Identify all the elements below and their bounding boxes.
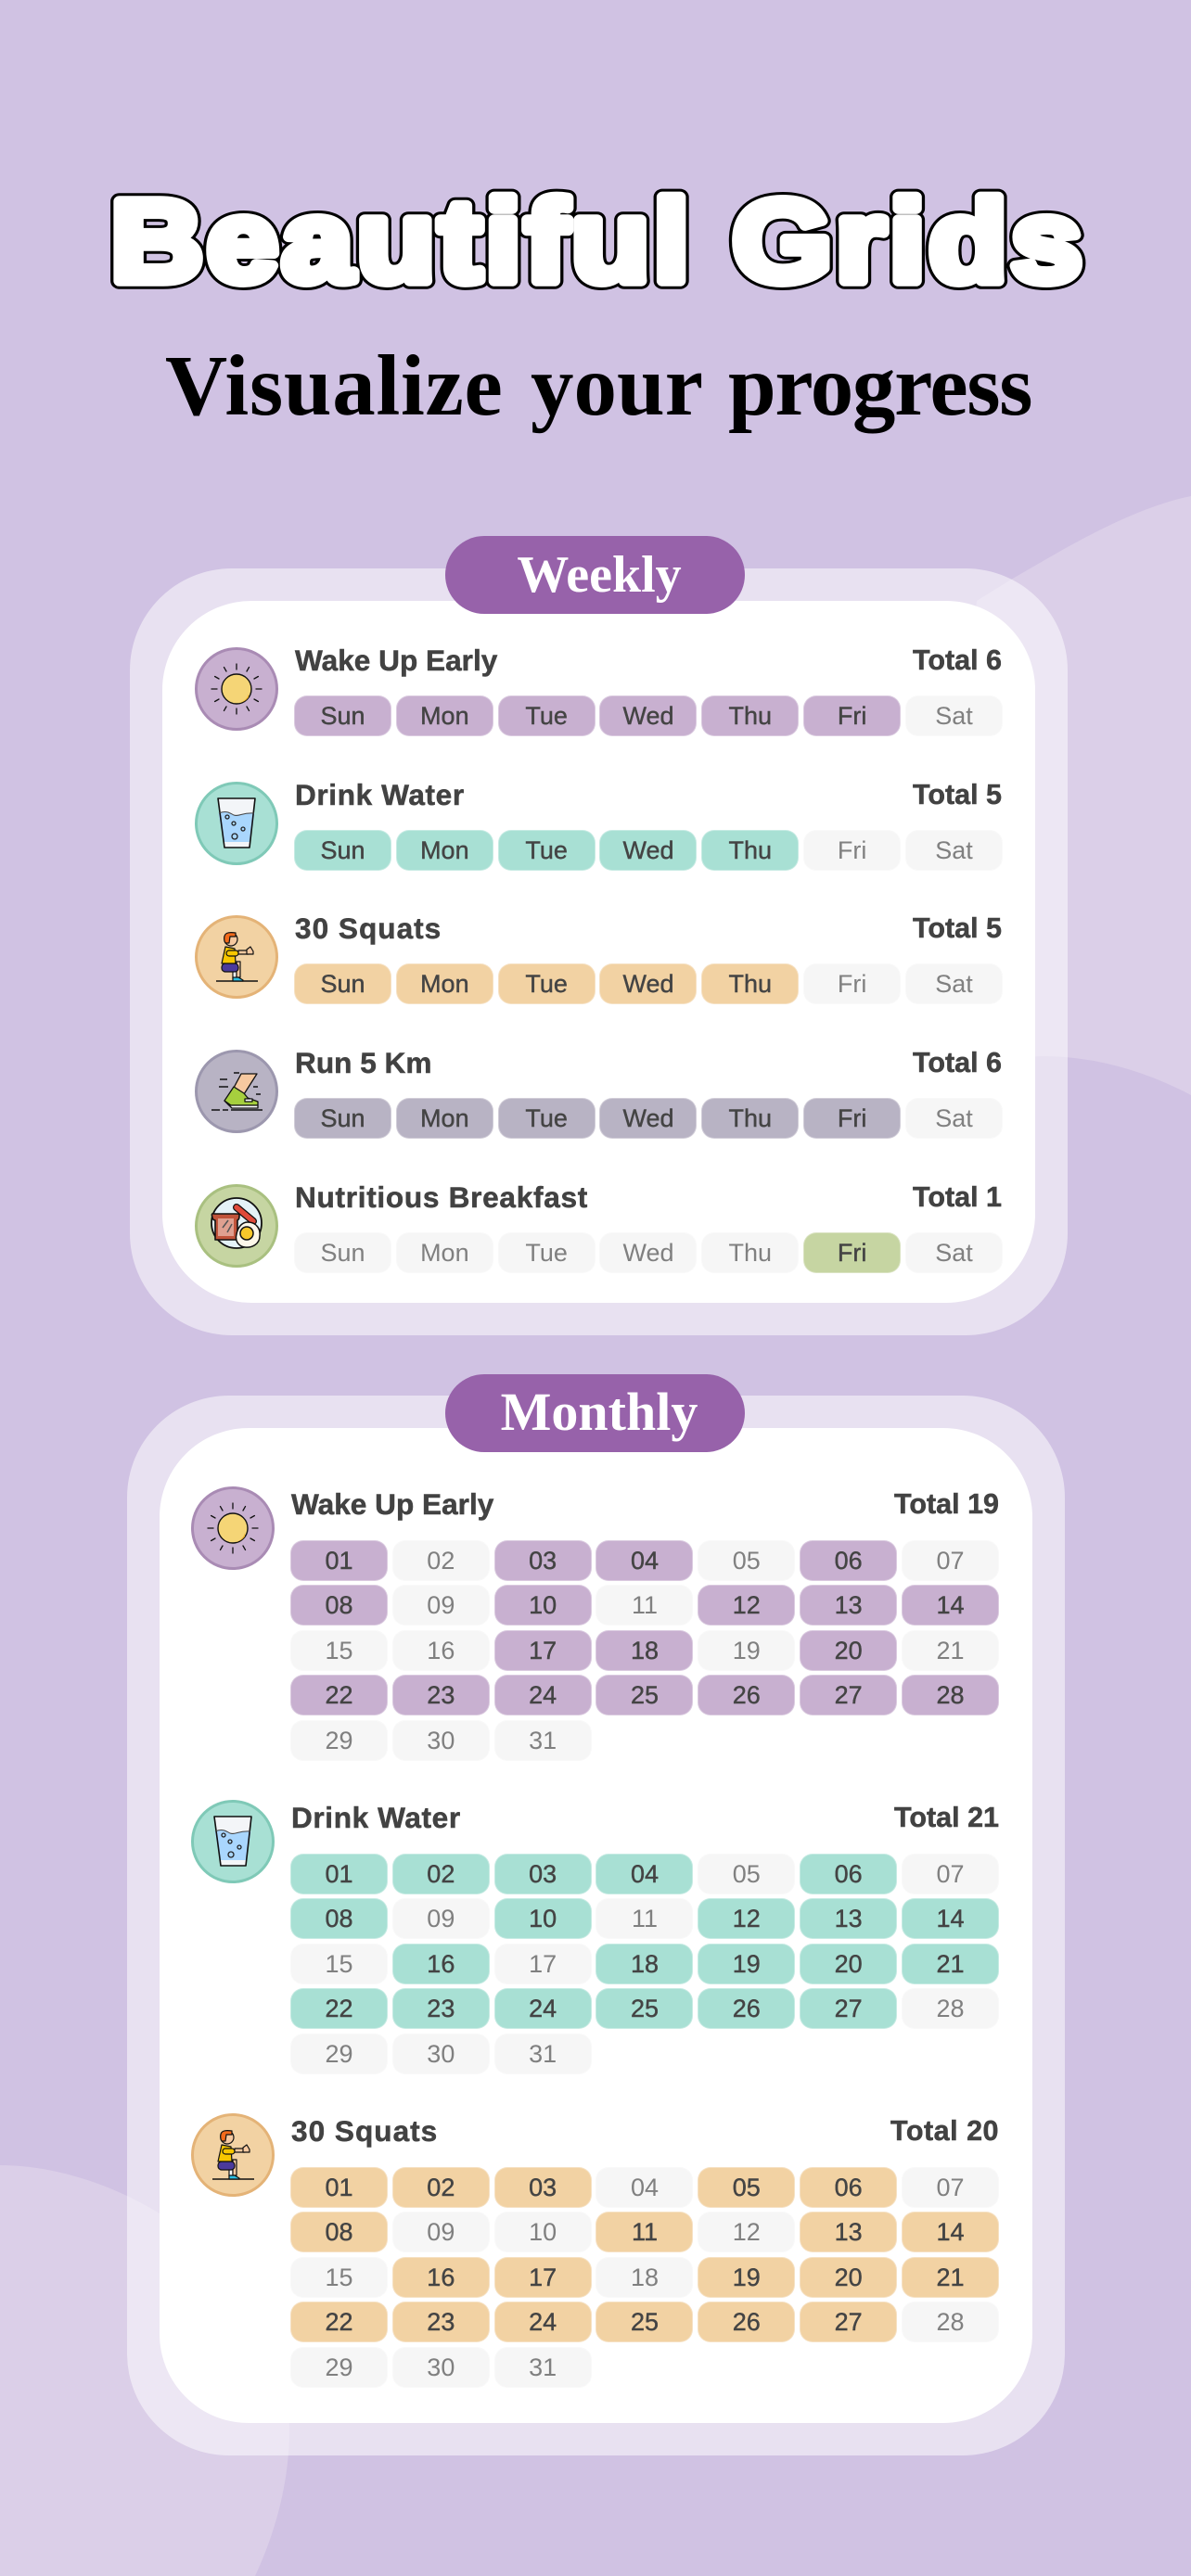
month grid: 06 (835, 1547, 863, 1575)
total: Total 21 (894, 1802, 999, 1833)
icon: sun (191, 1486, 275, 1570)
month grid: 12 (733, 2218, 761, 2246)
month grid: 25 (631, 1995, 659, 2022)
month grid (290, 1854, 999, 2073)
month grid: 20 (835, 1637, 863, 1664)
heading: Beautiful Grids: Beautiful Grids (111, 176, 1086, 306)
day grid: Sat (935, 1104, 973, 1132)
month grid: 13 (835, 2218, 863, 2246)
habit name: Nutritious Breakfast (295, 1180, 588, 1213)
day grid: Mon (420, 1239, 469, 1267)
month grid: 18 (631, 2264, 659, 2291)
day grid: Mon (420, 836, 469, 864)
month grid: 01 (325, 2174, 353, 2201)
month grid: 16 (427, 1637, 455, 1664)
month grid: 13 (835, 1591, 863, 1619)
day grid: Tue (525, 836, 568, 864)
blob: top right (928, 496, 1191, 1095)
icon: water glass (191, 1800, 275, 1883)
icon: water glass (195, 782, 278, 865)
month grid: 11 (632, 1591, 658, 1619)
month grid: 05 (733, 1860, 761, 1888)
month grid: 16 (427, 2264, 455, 2291)
month grid: 09 (427, 2218, 455, 2246)
month grid: 28 (936, 2308, 964, 2336)
total: Total 1 (913, 1181, 1002, 1213)
month grid: 20 (835, 1950, 863, 1978)
month grid: 19 (733, 2264, 761, 2291)
month grid: 02 (427, 1547, 455, 1575)
day grid (294, 695, 1002, 736)
icon: breakfast plate (195, 1184, 278, 1268)
month grid: 10 (529, 2218, 557, 2246)
total: Total 5 (913, 912, 1002, 944)
month grid: 27 (835, 1681, 863, 1709)
habit name: Drink Water (291, 1801, 461, 1834)
pill: Monthly (445, 1374, 745, 1452)
month grid: 28 (936, 1681, 964, 1709)
day grid: Fri (838, 702, 866, 730)
month grid: 04 (631, 2174, 659, 2201)
month grid: 03 (529, 1860, 557, 1888)
day grid: Sat (935, 836, 973, 864)
month grid: 07 (936, 2174, 964, 2201)
month grid: 01 (325, 1547, 353, 1575)
month grid: 17 (529, 1950, 557, 1978)
day grid: Thu (729, 836, 772, 864)
total: Total 6 (913, 1046, 1002, 1078)
month grid: 06 (835, 2174, 863, 2201)
month grid: 07 (936, 1860, 964, 1888)
month grid: 18 (631, 1637, 659, 1664)
month grid: 06 (835, 1860, 863, 1888)
icon: sun (195, 647, 278, 731)
day grid: Wed (622, 970, 673, 998)
month grid (290, 2167, 999, 2387)
day grid: Thu (729, 1239, 772, 1267)
day grid: Sun (320, 1104, 365, 1132)
month grid: 22 (325, 1995, 353, 2022)
day grid: Tue (525, 1239, 568, 1267)
day grid: Sun (320, 1239, 365, 1267)
day grid: Wed (622, 1239, 673, 1267)
month grid: 03 (529, 1547, 557, 1575)
month grid: 09 (427, 1591, 455, 1619)
habit name: Wake Up Early (295, 644, 497, 677)
day grid: Thu (729, 1104, 772, 1132)
month grid: 04 (631, 1547, 659, 1575)
day grid: Sat (935, 1239, 973, 1267)
month grid: 02 (427, 1860, 455, 1888)
month grid: 11 (632, 1905, 658, 1932)
month grid: 14 (936, 1591, 964, 1619)
month grid: 24 (529, 1681, 557, 1709)
subheading: Visualize your progress: progress (728, 338, 1031, 434)
total: Total 20 (890, 2115, 999, 2147)
month grid: 22 (325, 1681, 353, 1709)
day grid: Fri (838, 970, 866, 998)
month grid: 14 (936, 2218, 964, 2246)
row: weekly Drink Water (195, 777, 1002, 871)
day grid: Fri (838, 1239, 866, 1267)
habit name: Drink Water (295, 777, 465, 810)
subheading: Visualize your progress: Visualize (165, 338, 503, 434)
month grid: 30 (427, 2040, 455, 2068)
row: weekly Wake Up Early (195, 644, 1002, 736)
month grid: 08 (325, 1905, 353, 1932)
month grid: 15 (325, 2264, 353, 2291)
month grid: 07 (936, 1547, 964, 1575)
month grid: 24 (529, 1995, 557, 2022)
day grid: Sat (935, 970, 973, 998)
month grid: 25 (631, 2308, 659, 2336)
month grid: 08 (325, 2218, 353, 2246)
month grid: 31 (529, 2040, 557, 2068)
row: monthly 30 Squats (191, 2113, 999, 2387)
day grid: Mon (420, 702, 469, 730)
day grid (294, 1098, 1002, 1139)
day grid: Mon (420, 970, 469, 998)
month grid: 02 (427, 2174, 455, 2201)
month grid: 26 (733, 1681, 761, 1709)
month grid: 21 (936, 1950, 964, 1978)
month grid: 25 (631, 1681, 659, 1709)
title (110, 176, 1086, 434)
month grid: 09 (427, 1905, 455, 1932)
day grid: Sun (320, 970, 365, 998)
month grid: 05 (733, 1547, 761, 1575)
total: Total 19 (894, 1488, 999, 1520)
month grid: 03 (529, 2174, 557, 2201)
day grid: Wed (622, 1104, 673, 1132)
month grid: 29 (325, 2353, 353, 2381)
heading: Beautiful Grids: Beautiful Grids (111, 176, 1086, 306)
icon: running shoe (195, 1050, 278, 1133)
month grid: 16 (427, 1950, 455, 1978)
month grid: 28 (936, 1995, 964, 2022)
month grid: 11 (632, 2218, 658, 2246)
day grid: Thu (729, 970, 772, 998)
habit name: Run 5 Km (295, 1046, 431, 1079)
month grid: 12 (733, 1591, 761, 1619)
month grid: 27 (835, 1995, 863, 2022)
day grid: Sun (320, 836, 365, 864)
icon: squatting person (191, 2113, 275, 2197)
row: monthly Wake Up Early (191, 1486, 999, 1760)
pill: Weekly: Weekly (517, 546, 682, 604)
pill: Weekly (445, 536, 745, 614)
month grid (290, 1540, 999, 1760)
month grid: 21 (936, 2264, 964, 2291)
month grid: 26 (733, 1995, 761, 2022)
month grid: 21 (936, 1637, 964, 1664)
day grid: Mon (420, 1104, 469, 1132)
month grid: 29 (325, 2040, 353, 2068)
month grid: 30 (427, 1727, 455, 1754)
month grid: 26 (733, 2308, 761, 2336)
month grid: 04 (631, 1860, 659, 1888)
month grid: 10 (529, 1905, 557, 1932)
day grid (294, 963, 1002, 1004)
blob: bottom left (0, 2165, 289, 2576)
day grid: Thu (729, 702, 772, 730)
month grid: 23 (427, 1681, 455, 1709)
day grid: Fri (838, 836, 866, 864)
panel: monthly (127, 1396, 1065, 2455)
day grid: Wed (622, 702, 673, 730)
day grid (295, 1232, 1002, 1273)
month grid: 22 (325, 2308, 353, 2336)
month grid: 17 (529, 2264, 557, 2291)
row: weekly Nutritious Breakfast (195, 1180, 1002, 1273)
month grid: 31 (529, 1727, 557, 1754)
habit name: 30 Squats (291, 2114, 438, 2148)
day grid: Sat (935, 702, 973, 730)
month grid: 18 (631, 1950, 659, 1978)
month grid: 12 (733, 1905, 761, 1932)
month grid: 08 (325, 1591, 353, 1619)
month grid: 15 (325, 1950, 353, 1978)
day grid: Tue (525, 970, 568, 998)
row: monthly Drink Water (191, 1800, 999, 2073)
day grid: Tue (525, 702, 568, 730)
month grid: 30 (427, 2353, 455, 2381)
icon: squatting person (195, 915, 278, 999)
month grid: 23 (427, 2308, 455, 2336)
habit name: Wake Up Early (291, 1487, 493, 1521)
pill: Monthly: Monthly (501, 1382, 698, 1442)
day grid: Wed (622, 836, 673, 864)
month grid: 01 (325, 1860, 353, 1888)
panel: weekly (130, 568, 1068, 1335)
month grid: 27 (835, 2308, 863, 2336)
month grid: 13 (835, 1905, 863, 1932)
month grid: 19 (733, 1950, 761, 1978)
month grid: 14 (936, 1905, 964, 1932)
total: Total 5 (913, 779, 1002, 810)
month grid: 24 (529, 2308, 557, 2336)
day grid: Sun (320, 702, 365, 730)
total: Total 6 (913, 644, 1002, 675)
row: weekly Run 5 Km (195, 1046, 1002, 1139)
day grid: Fri (838, 1104, 866, 1132)
habit name: 30 Squats (295, 911, 442, 944)
day grid: Tue (525, 1104, 568, 1132)
row: weekly 30 Squats (195, 911, 1002, 1004)
month grid: 23 (427, 1995, 455, 2022)
month grid: 10 (529, 1591, 557, 1619)
month grid: 05 (733, 2174, 761, 2201)
month grid: 19 (733, 1637, 761, 1664)
month grid: 17 (529, 1637, 557, 1664)
month grid: 15 (325, 1637, 353, 1664)
subheading: Visualize your progress: your (531, 338, 702, 434)
day grid (294, 830, 1002, 871)
month grid: 31 (529, 2353, 557, 2381)
month grid: 20 (835, 2264, 863, 2291)
month grid: 29 (325, 1727, 353, 1754)
